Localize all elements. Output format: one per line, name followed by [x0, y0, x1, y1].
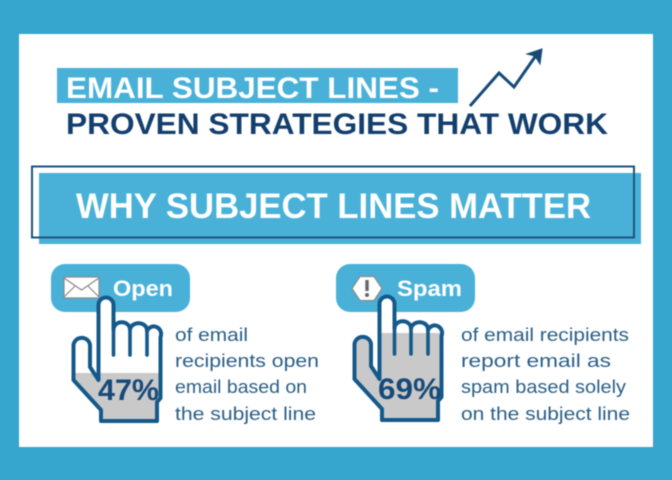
text: open description: of email: [175, 325, 248, 345]
section banner: WHY SUBJECT LINES MATTER: [76, 187, 591, 226]
button: spam: Spam: [397, 276, 462, 301]
icon: pointing hand 69%: [352, 296, 445, 422]
panel: open statistic: [51, 264, 319, 424]
icon: envelope: [64, 277, 99, 298]
text: spam description: spam based solely: [461, 377, 626, 397]
button: spam: [336, 264, 475, 312]
text: open description: email based on: [175, 377, 307, 397]
icon: pointing hand 69%: 69%: [378, 373, 441, 406]
title: [57, 68, 608, 141]
text: spam description: [461, 325, 630, 424]
title line 1 with highlight: EMAIL SUBJECT LINES -: [66, 72, 439, 105]
button: open: Open: [113, 276, 173, 301]
icon: rising arrow: [470, 49, 542, 106]
text: open description: the subject line: [175, 404, 316, 424]
title line 2: PROVEN STRATEGIES THAT WORK: [66, 108, 608, 141]
icon: pointing hand 47%: 47%: [98, 374, 159, 407]
text: spam description: on the subject line: [461, 404, 630, 424]
icon: warning hexagon: [352, 276, 382, 300]
icon: pointing hand 47%: [71, 298, 164, 423]
section banner: [32, 166, 641, 244]
button: open: [51, 264, 190, 312]
text: spam description: of email recipients: [461, 325, 629, 345]
text: open description: [175, 325, 319, 424]
text: open description: recipients open: [175, 351, 319, 371]
panel: spam statistic: [336, 264, 630, 424]
text: spam description: report email as: [461, 351, 611, 371]
